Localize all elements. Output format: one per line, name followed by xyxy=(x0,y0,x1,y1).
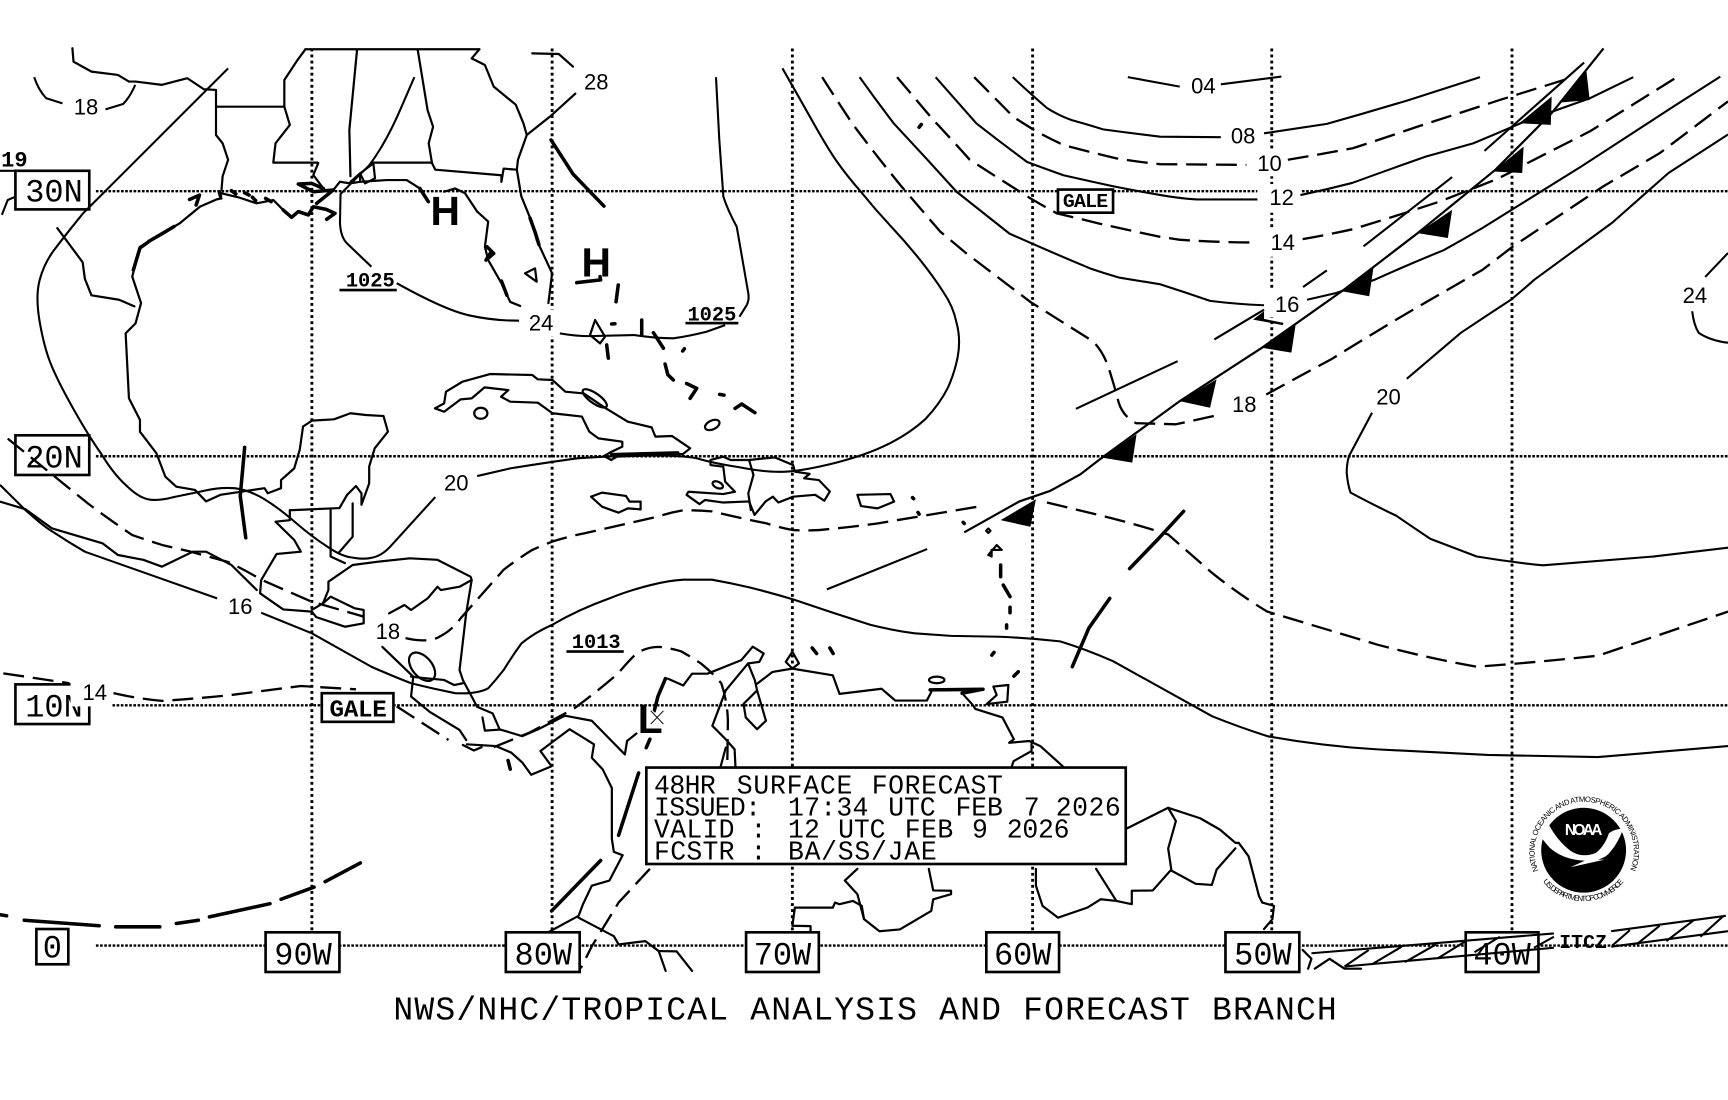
forecast info box: UTC xyxy=(888,794,936,824)
latitude and longitude labels: 60W xyxy=(994,937,1052,974)
forecast info box: UTC xyxy=(838,816,885,846)
ITCZ hatched band xyxy=(1311,916,1728,966)
forecast info box: 17:34 xyxy=(788,794,868,824)
contour value labels: 14 xyxy=(1271,230,1295,255)
latitude and longitude labels: 50W xyxy=(1234,937,1293,974)
GALE warning labels: GALE xyxy=(1063,190,1108,213)
surface troughs xyxy=(827,63,1584,589)
contour value labels: 16 xyxy=(228,594,253,619)
NOAA logo: NATIONAL OCEANIC AND ATMOSPHERIC ADMINISTRATION xyxy=(1529,796,1640,872)
contour value labels: 20 xyxy=(1376,384,1401,409)
contour value labels: 18 xyxy=(74,95,98,120)
pressure labels: 1025 xyxy=(687,305,736,328)
NOAA logo: U.S. DEPARTMENT OF COMMERCE xyxy=(1544,878,1624,902)
forecast info box: VALID xyxy=(654,816,735,846)
land: coastlines and borders xyxy=(0,48,1361,971)
forecast info box: 12 xyxy=(788,816,820,846)
forecast info box: SURFACE xyxy=(737,771,852,801)
high and low pressure centers: H xyxy=(430,188,460,234)
contour value labels: 16 xyxy=(1275,292,1299,317)
forecast info box: : xyxy=(750,838,766,868)
forecast info box: FORECAST xyxy=(872,771,1003,801)
solid isobars xyxy=(0,68,1728,757)
forecast info box: : xyxy=(750,816,766,846)
latitude and longitude labels: 80W xyxy=(515,937,573,974)
contour value labels: 18 xyxy=(1232,392,1256,417)
forecast info box: FEB xyxy=(955,794,1003,824)
GALE warning labels xyxy=(322,190,1113,724)
NOAA logo: NOAA xyxy=(1565,822,1602,839)
contour value labels: 10 xyxy=(1257,151,1282,176)
contour value labels: 24 xyxy=(529,311,553,336)
forecast info box: 9 xyxy=(972,816,988,846)
contour value labels: 18 xyxy=(376,619,400,644)
forecast info box: 48HR xyxy=(654,771,716,801)
forecast info box: ISSUED: xyxy=(654,794,761,824)
latitude and longitude labels: 30N xyxy=(25,175,83,212)
latitude and longitude labels: 70W xyxy=(754,937,812,974)
forecast info box: FEB xyxy=(905,816,953,846)
contour value labels: 19 xyxy=(1,148,28,173)
thick tropical waves xyxy=(0,140,1184,927)
contour value labels: 08 xyxy=(1231,123,1255,148)
latitude and longitude labels: 40W xyxy=(1473,937,1532,974)
contour value labels: 12 xyxy=(1269,185,1294,210)
latitude and longitude labels: 20N xyxy=(25,440,83,477)
forecast info box: BA/SS/JAE xyxy=(788,838,937,868)
cold front with triangles xyxy=(964,48,1603,532)
contour value labels: 20 xyxy=(444,470,469,495)
footer credit: NWS/NHC/TROPICAL ANALYSIS AND FORECAST BRANCH xyxy=(393,991,1337,1029)
high and low pressure centers xyxy=(430,188,663,742)
forecast info box: 2026 xyxy=(1056,794,1121,824)
forecast info box xyxy=(646,768,1126,868)
contour value labels: 28 xyxy=(584,69,608,94)
contour value labels: 14 xyxy=(83,680,107,705)
high and low pressure centers: L xyxy=(638,696,663,742)
contour value labels: 24 xyxy=(1683,283,1707,308)
latitude and longitude labels: 0 xyxy=(43,931,62,968)
latitude and longitude labels: 90W xyxy=(274,937,333,974)
label: ITCZ: ITCZ xyxy=(1559,931,1607,954)
forecast info box: 2026 xyxy=(1007,816,1070,846)
latitude and longitude labels xyxy=(15,171,1538,974)
pressure labels: 1013 xyxy=(572,632,621,655)
latitude and longitude labels: 10N xyxy=(25,689,83,726)
GALE warning labels: GALE xyxy=(330,697,387,724)
high and low pressure centers: H xyxy=(581,240,611,286)
pressure labels: 1025 xyxy=(346,271,395,294)
contour value labels xyxy=(1,69,1707,705)
pressure labels xyxy=(339,271,738,655)
contour value labels: 04 xyxy=(1191,74,1216,99)
forecast info box: 7 xyxy=(1024,794,1040,824)
forecast info box: FCSTR xyxy=(654,838,735,868)
